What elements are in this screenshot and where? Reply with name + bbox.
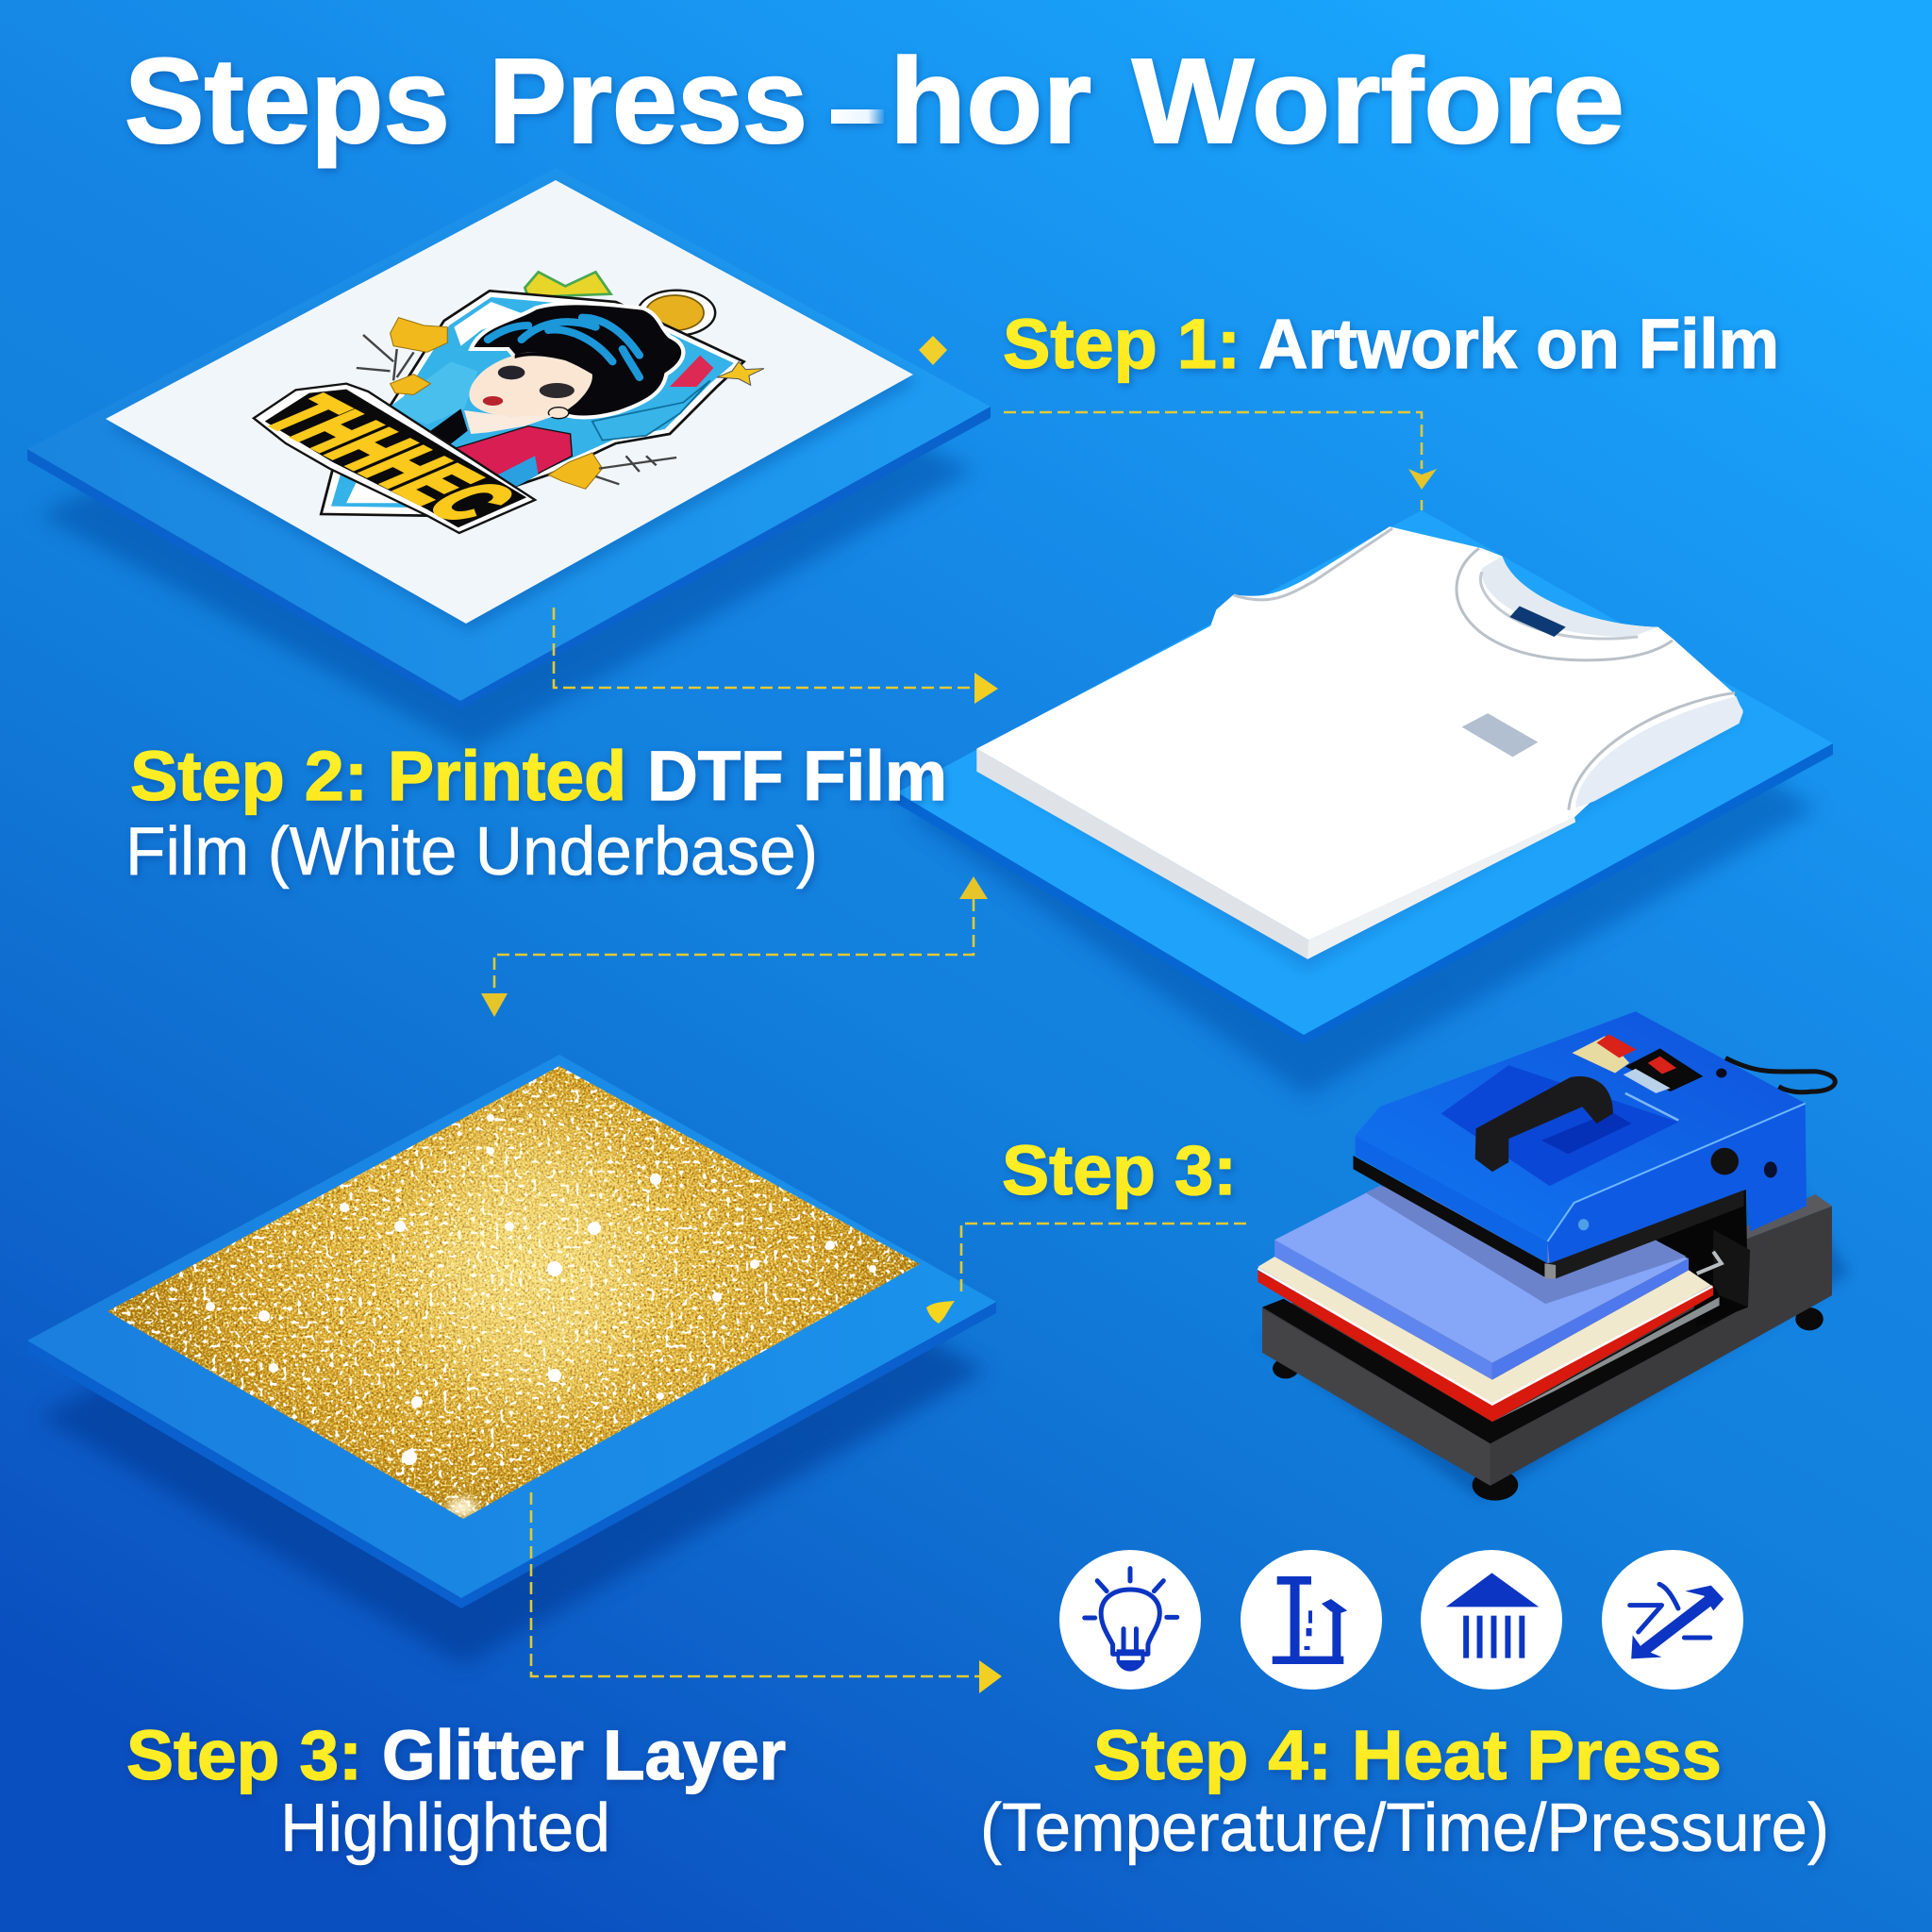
artwork: illustrated character badge	[242, 272, 764, 533]
step 3 bottom caption: Glitter Layer	[382, 1716, 786, 1794]
coin	[638, 291, 715, 336]
press base	[1262, 1190, 1832, 1501]
step 1 label: Step 1:	[1003, 305, 1241, 383]
neck label	[1509, 606, 1566, 637]
icon: bullet diamond	[919, 336, 947, 365]
power cord	[1725, 1058, 1835, 1092]
icon: pressure plate	[1421, 1550, 1562, 1690]
title: hor	[890, 34, 1091, 169]
arrow: step 3 label to glitter	[926, 1224, 1246, 1324]
step 3 side label	[1002, 1131, 1237, 1209]
face	[469, 353, 592, 417]
step 2 label	[125, 737, 947, 890]
title: Worfore	[1132, 34, 1624, 169]
title	[125, 34, 1624, 169]
control panel	[1572, 1036, 1629, 1073]
icon: light bulb	[1059, 1550, 1201, 1690]
crown	[525, 272, 610, 297]
step 3 bottom caption: Highlighted	[280, 1790, 610, 1866]
icons row	[1059, 1550, 1743, 1690]
step 4 caption	[980, 1716, 1829, 1866]
leaves and star	[391, 318, 447, 352]
arrow: glitter to heat press	[531, 1492, 1002, 1693]
arrow: step 1 to t-shirt	[1004, 412, 1437, 510]
step 3 bottom caption	[126, 1716, 786, 1866]
panel: step 1 film sheet	[27, 168, 991, 750]
step 2 label: Film (White Underbase)	[125, 814, 818, 890]
step 1 label	[1003, 305, 1779, 383]
hair	[471, 303, 683, 417]
t-shirt	[976, 526, 1743, 959]
artwork lettering: THHHEC	[242, 386, 537, 532]
panel: step 2 t-shirt platform	[897, 510, 1833, 1096]
step 4 caption: (Temperature/Time/Pressure)	[980, 1790, 1829, 1866]
chest patch	[1462, 713, 1538, 757]
neck and shirt	[464, 410, 557, 434]
shield	[321, 291, 744, 516]
step 2 label: Step 2:	[130, 737, 368, 815]
lower platen layers	[1257, 1257, 1720, 1422]
banner	[254, 384, 535, 533]
step 2 label: Printed	[388, 737, 626, 815]
gold glitter sheet	[94, 1057, 934, 1528]
panel: step 3 glitter platform	[27, 1055, 996, 1665]
step 3 bottom caption: Step 3:	[126, 1716, 362, 1794]
press handle	[1475, 1076, 1613, 1172]
arrow: t-shirt loop to glitter	[481, 876, 988, 1017]
upper press head	[1353, 1011, 1835, 1278]
step 2 label: DTF Film	[647, 737, 947, 815]
blue silicone pad	[1274, 1186, 1689, 1379]
step 1 label: Artwork on Film	[1258, 305, 1779, 383]
step 4 caption: Step 4: Heat Press	[1093, 1716, 1722, 1794]
white film sheet	[106, 180, 913, 624]
title: Steps	[125, 34, 450, 169]
title: Press	[489, 34, 808, 169]
icon: measure tower	[1241, 1550, 1382, 1690]
step 3 side label: 3:	[1174, 1131, 1237, 1209]
arrow: film to t-shirt	[554, 608, 998, 704]
heat press machine	[1257, 1011, 1849, 1501]
step 3 side label: Step	[1002, 1131, 1156, 1209]
icon: direction arrows	[1602, 1550, 1743, 1690]
